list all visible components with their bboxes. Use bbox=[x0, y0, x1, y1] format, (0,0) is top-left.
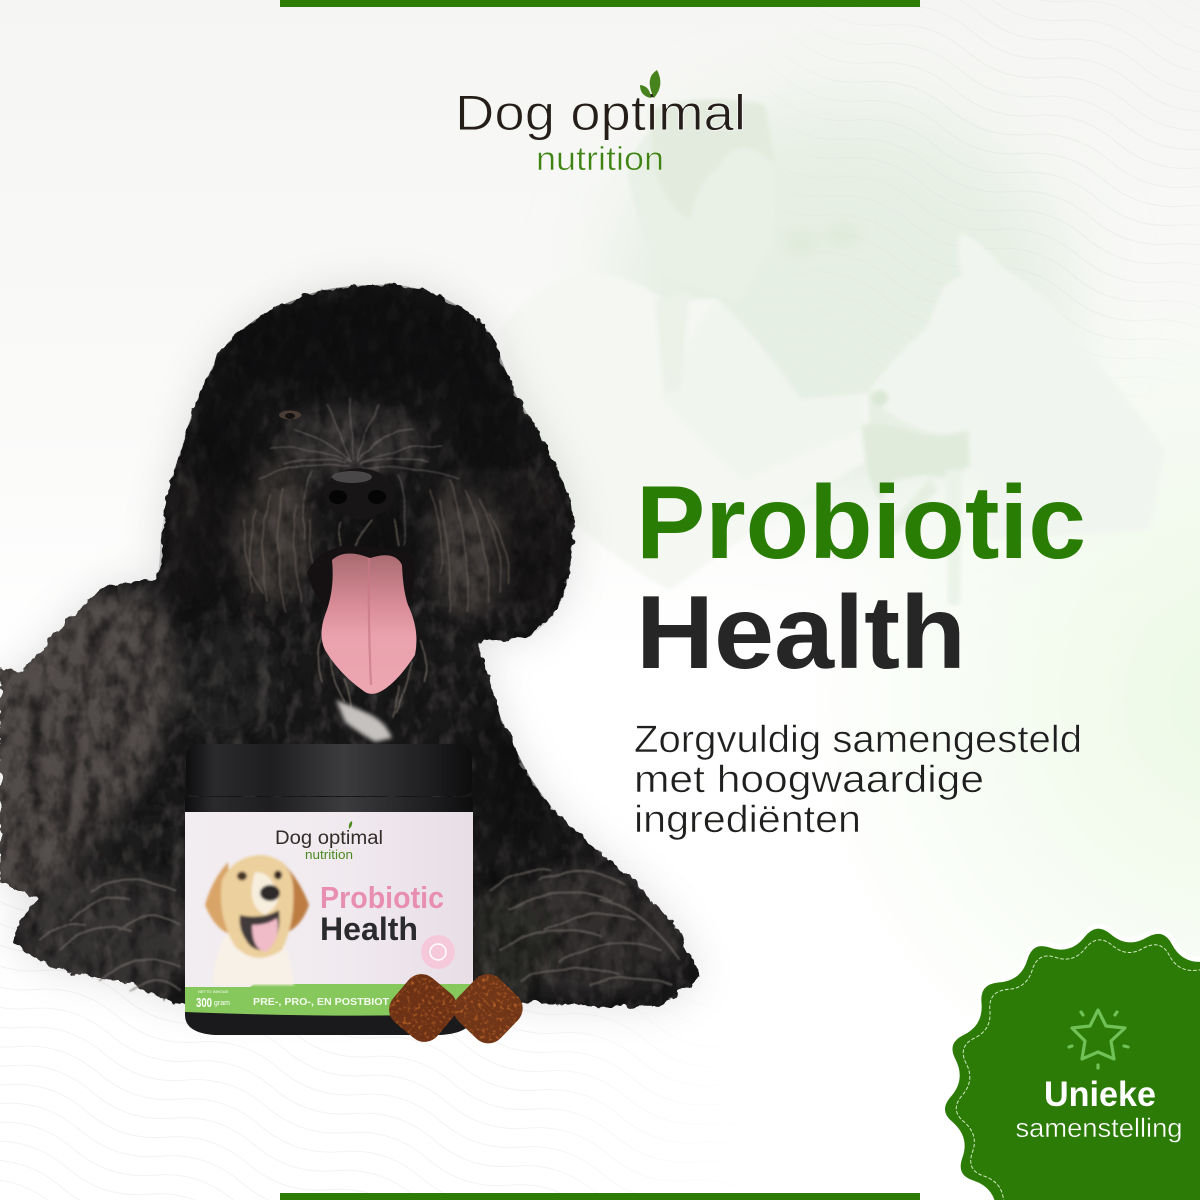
logo wordmark: Dog optimal bbox=[455, 85, 746, 141]
logo leaf icon bbox=[640, 70, 660, 98]
ghost dog bbox=[871, 232, 1165, 540]
badge heading: Unieke bbox=[1044, 1075, 1156, 1114]
jar logo: Dog optimal bbox=[275, 828, 383, 849]
ghost photo: man and dog bbox=[500, 0, 1200, 605]
top accent bar bbox=[280, 0, 920, 7]
ghost backdrop soft spots bbox=[785, 226, 859, 252]
dog mouth bbox=[307, 546, 414, 612]
dog soft shadow bbox=[0, 285, 700, 1007]
jar band text: gram bbox=[214, 1000, 230, 1007]
jar neck bbox=[185, 797, 473, 813]
description text: ingrediënten bbox=[634, 799, 861, 841]
headline word: Health: Health bbox=[636, 575, 966, 691]
ghost backdrop pattern bbox=[849, 0, 1200, 358]
dog eyes bbox=[279, 410, 301, 420]
description text: met hoogwaardige bbox=[634, 759, 984, 801]
ghost green backdrop bbox=[610, 100, 1070, 500]
jar label bbox=[185, 812, 473, 987]
jar band text: PRE-, PRO-, EN POSTBIOT bbox=[253, 997, 389, 1008]
jar subtitle: Health bbox=[320, 911, 418, 947]
main dog photo bbox=[0, 270, 720, 1020]
badge: unieke samenstelling bbox=[942, 926, 1200, 1200]
jar golden dog illustration bbox=[205, 855, 309, 985]
dog dark head overlay bbox=[170, 285, 560, 850]
jar seal bbox=[421, 935, 455, 969]
jar logo bbox=[275, 821, 383, 862]
badge subheading: samenstelling bbox=[1016, 1113, 1182, 1143]
jar band text: 300 bbox=[196, 995, 212, 1010]
bottom accent bar bbox=[280, 1193, 920, 1200]
product jar bbox=[185, 744, 530, 1050]
headline bbox=[636, 465, 1086, 691]
dog tongue bbox=[322, 553, 416, 694]
description text bbox=[634, 719, 1082, 841]
jar title: Probiotic bbox=[320, 880, 444, 915]
dog hair strands bbox=[40, 398, 680, 990]
logo bbox=[455, 70, 746, 177]
ghost man sweater bbox=[500, 274, 872, 590]
rear body dark streaks bbox=[23, 620, 150, 880]
tongue crease bbox=[369, 558, 371, 685]
icon: star with rays bbox=[1069, 1010, 1128, 1068]
jar logo: nutrition bbox=[305, 847, 353, 862]
dog white chest patch bbox=[336, 700, 392, 742]
ghost hands and leash bbox=[862, 423, 970, 605]
jar band text: NETTO INHOUD bbox=[198, 989, 228, 994]
badge dashed line bbox=[956, 940, 1200, 1200]
jar green band bbox=[185, 984, 473, 1016]
jar body bbox=[185, 800, 473, 1035]
jar lid bbox=[186, 744, 472, 796]
logo tagline: nutrition bbox=[536, 140, 664, 177]
ghost man head bbox=[628, 100, 776, 302]
dog fur body bbox=[0, 270, 720, 1020]
jar band text bbox=[196, 989, 389, 1010]
headline word: Probiotic: Probiotic bbox=[636, 465, 1086, 581]
description text: Zorgvuldig samengesteld bbox=[634, 719, 1082, 761]
badge scalloped shape bbox=[942, 926, 1200, 1200]
dog nose bbox=[323, 468, 395, 520]
chews bbox=[382, 967, 530, 1050]
